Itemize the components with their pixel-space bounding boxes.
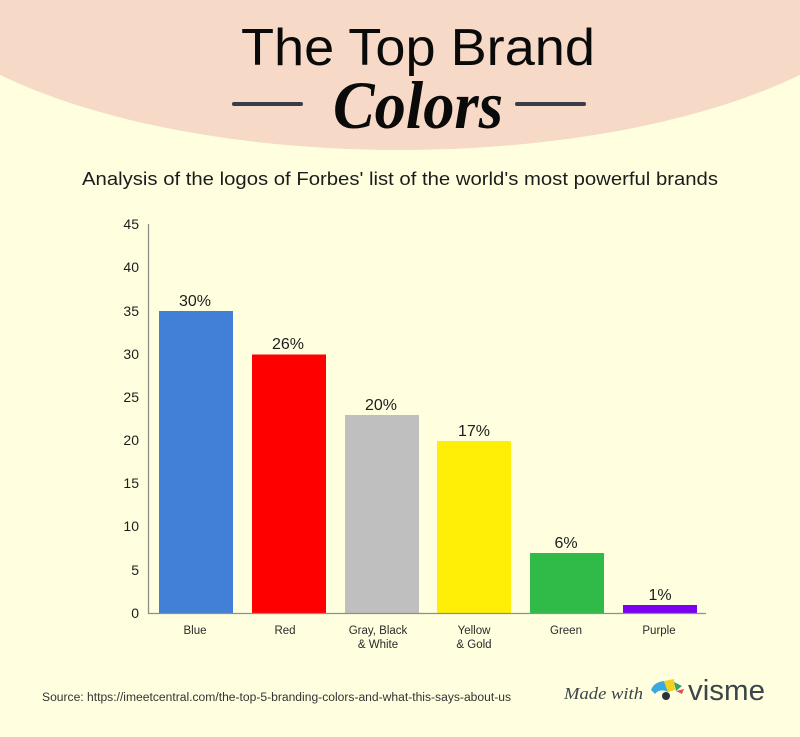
bar: red [252, 354, 326, 613]
icon: visme mark [651, 679, 684, 700]
title script word: Colors [333, 67, 503, 143]
value labels: 1% [648, 587, 672, 604]
subtitle: Analysis of the logos of Forbes' list of the world's most powerful brands [82, 168, 718, 189]
bar: gray [345, 415, 419, 613]
y axis labels: 40 [123, 259, 139, 275]
y axis labels: 30 [123, 346, 139, 362]
value labels: 20% [365, 397, 397, 414]
bar: yellow [437, 441, 511, 613]
made with visme logo: visme [688, 675, 765, 707]
made with visme logo [563, 675, 765, 707]
y axis labels: 15 [123, 475, 139, 491]
title flourish right [515, 102, 586, 106]
category labels: & Gold [456, 639, 492, 651]
title [241, 19, 595, 143]
value labels: 6% [554, 535, 578, 552]
category labels: Yellow [458, 625, 491, 637]
value labels: 30% [179, 293, 211, 310]
category labels: Gray, Black [349, 625, 408, 637]
y axis labels: 45 [123, 216, 139, 232]
value labels: 26% [272, 336, 304, 353]
y axis labels: 35 [123, 303, 139, 319]
category labels: Blue [183, 625, 207, 637]
made with visme logo: Made with [563, 684, 643, 703]
bar chart [123, 216, 706, 651]
category labels: Red [274, 625, 296, 637]
y axis labels: 25 [123, 389, 139, 405]
y axis labels: 10 [123, 518, 139, 534]
bar: purple [623, 605, 697, 613]
category labels: Purple [642, 625, 676, 637]
y axis labels: 0 [131, 605, 139, 621]
value labels [179, 293, 672, 604]
title flourish left [232, 102, 303, 106]
category labels: & White [358, 639, 398, 651]
y axis labels [123, 216, 139, 621]
axes [148, 224, 706, 614]
y axis labels: 5 [131, 562, 139, 578]
category labels: Green [550, 625, 582, 637]
title: The Top Brand [241, 19, 595, 77]
bar: green [530, 553, 604, 613]
y axis labels: 20 [123, 432, 139, 448]
header arc [0, 0, 800, 150]
source: Source: https://imeetcentral.com/the-top-5-branding-colors-and-what-this-says-about-us [42, 692, 511, 704]
value labels: 17% [458, 423, 490, 440]
category labels [183, 625, 676, 651]
bar: blue [159, 311, 233, 613]
